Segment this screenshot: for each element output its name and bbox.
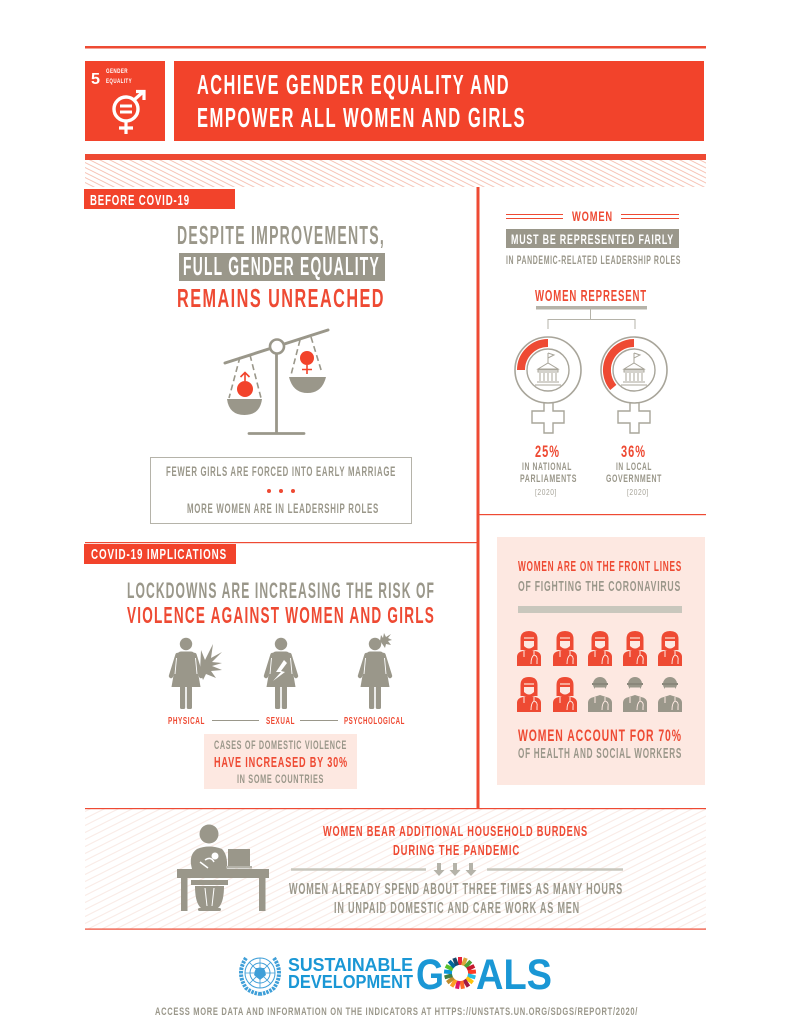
goal 5 badge: 5 [91,71,100,88]
heading: lockdowns: LOCKDOWNS ARE INCREASING THE RISK OF [127,578,435,603]
heading: women must be represented fairly: MUST BE REPRESENTED FAIRLY [511,231,674,247]
icon: un emblem [241,958,279,994]
logo: sustainable development goals: ALS [476,951,552,999]
callout: domestic violence: IN SOME COUNTRIES [237,774,324,786]
heading: lockdowns [127,578,435,628]
callout: progress box [150,458,412,524]
goal 5 badge: EQUALITY [106,79,132,85]
panel: front lines: OF FIGHTING THE CORONAVIRUS [518,579,681,595]
hatched band [85,154,706,187]
panel dividers [85,187,706,808]
chart: 36% in local government [601,337,667,497]
chart: 36% in local government: 36% [621,442,646,461]
logo: sustainable development goals: DEVELOPMENT [288,972,413,992]
icon: unbalanced scale [225,330,328,434]
callout: domestic violence: CASES OF DOMESTIC VIOLENCE [214,740,347,752]
labels: types of violence: PSYCHOLOGICAL [344,715,405,727]
section tag: before covid: BEFORE COVID-19 [90,192,190,209]
labels: types of violence [168,715,405,727]
chart: 36% in local government: GOVERNMENT [606,473,662,485]
panel: household burdens: IN UNPAID DOMESTIC AND CARE WORK AS MEN [334,900,580,917]
icon: physical violence [171,638,222,709]
panel: front lines [497,537,705,785]
callout: progress box: MORE WOMEN ARE IN LEADERSHIP ROLES [187,501,379,516]
panel: household burdens [85,808,706,930]
heading: women represent: WOMEN REPRESENT [535,288,647,305]
chart: 25% in national parliaments: 25% [535,442,560,461]
chart: 25% in national parliaments [515,337,581,497]
title banner [174,61,704,141]
pictogram: 70 percent women health workers [517,631,682,712]
heading: full gender equality: DESPITE IMPROVEMENTS, [177,220,385,250]
top rule [85,46,706,48]
callout: domestic violence [204,734,357,789]
icon: sexual violence [266,638,296,709]
heading: women must be represented fairly [506,208,681,267]
heading: full gender equality: REMAINS UNREACHED [177,283,385,313]
icon: down arrows [434,863,476,876]
section tag: covid-19 implications: COVID-19 IMPLICATIONS [91,546,227,563]
icon: sdg colour wheel [444,957,476,989]
callout: progress box: FEWER GIRLS ARE FORCED INTO EARLY MARRIAGE [166,464,396,479]
chart: 25% in national parliaments: [2020] [535,488,557,497]
panel: front lines: WOMEN ACCOUNT FOR 70% [518,726,682,745]
panel: household burdens: DURING THE PANDEMIC [393,843,520,859]
heading: women must be represented fairly: WOMEN [572,208,613,224]
goal 5 badge [85,61,165,141]
chart: 36% in local government: [2020] [627,488,649,497]
panel: household burdens: WOMEN BEAR ADDITIONAL HOUSEHOLD BURDENS [323,824,588,840]
labels: types of violence: SEXUAL [266,715,295,727]
icon: psychological violence [360,633,392,709]
heading: women represent [535,288,647,329]
chart: 36% in local government: IN LOCAL [616,461,652,473]
logo: sustainable development goals: SUSTAINABLE [288,955,413,975]
logo: sustainable development goals [288,951,552,999]
logo: sustainable development goals: G [416,951,444,999]
heading: lockdowns: VIOLENCE AGAINST WOMEN AND GIRLS [127,602,435,628]
chart: 25% in national parliaments: IN NATIONAL [522,461,572,473]
heading: women must be represented fairly: IN PANDEMIC-RELATED LEADERSHIP ROLES [506,255,681,267]
labels: types of violence: PHYSICAL [168,715,205,727]
heading: full gender equality: FULL GENDER EQUALITY [183,251,380,281]
title banner: EMPOWER ALL WOMEN AND GIRLS [197,102,526,133]
chart: 25% in national parliaments: PARLIAMENTS [520,473,577,485]
icon: woman at desk with baby [177,824,269,911]
heading: full gender equality [177,220,385,313]
title banner: ACHIEVE GENDER EQUALITY AND [197,69,510,100]
callout: domestic violence: HAVE INCREASED BY 30% [214,755,348,771]
section tag: covid-19 implications [84,544,236,564]
goal 5 badge: GENDER [106,69,128,75]
